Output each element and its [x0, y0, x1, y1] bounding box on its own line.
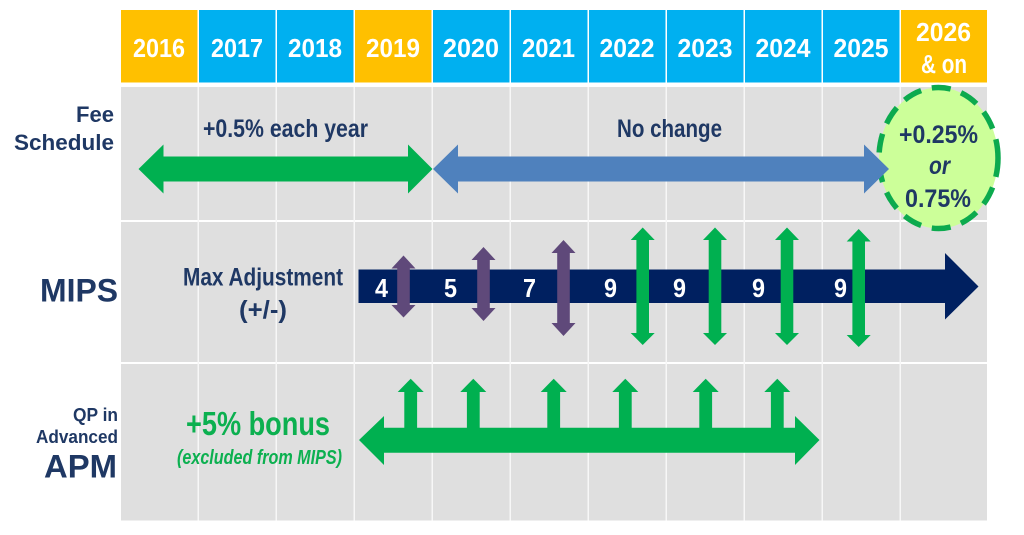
year 2023: 2023: [678, 35, 732, 63]
year 2019: 2019: [366, 35, 420, 63]
MIPS adjustment numbers: 9: [673, 273, 686, 303]
year 2026 and on: & on: [921, 51, 967, 79]
row label: QP in Advanced APM: APM: [44, 448, 117, 484]
year 2022: [589, 10, 666, 82]
row label: QP in Advanced APM: [36, 405, 118, 484]
row label: Fee Schedule: Fee: [76, 102, 114, 127]
year 2022: 2022: [600, 35, 654, 63]
year 2024: 2024: [756, 35, 811, 63]
row label: MIPS: MIPS: [40, 272, 118, 308]
arrow: purple 4 percent: [392, 256, 416, 318]
callout: 2026 conversion factor: or: [929, 152, 951, 180]
arrow: green 9 percent 2022: [631, 228, 655, 345]
text: Max Adjustment (+/-): Max Adjustment: [183, 264, 344, 292]
year 2026 and on: 2026: [916, 19, 971, 47]
row label: Fee Schedule: Schedule: [14, 130, 114, 155]
row label: QP in Advanced APM: Advanced: [36, 427, 118, 447]
year 2025: [823, 10, 900, 82]
callout: 2026 conversion factor: 0.75%: [905, 185, 971, 213]
text: Max Adjustment (+/-): (+/-): [239, 296, 287, 324]
arrow: green 9 percent 2023: [703, 228, 727, 345]
arrow: navy MIPS timeline: [358, 253, 978, 320]
MIPS adjustment numbers: 9: [834, 273, 847, 303]
row label: QP in Advanced APM: QP in: [73, 405, 118, 425]
arrow: purple 7 percent: [552, 240, 576, 336]
callout: 2026 conversion factor: +0.25%: [899, 121, 978, 149]
text: No change: No change: [617, 115, 722, 143]
text: excluded from MIPS: (excluded from MIPS): [177, 447, 342, 469]
year 2020: [433, 10, 510, 82]
text: +5% bonus: +5% bonus: [186, 405, 330, 442]
year 2025: 2025: [834, 35, 888, 63]
arrow: green two-way fee schedule: [138, 144, 432, 194]
year 2016: 2016: [133, 35, 185, 63]
arrow: green APM bonus timeline with upward arrows: [359, 379, 820, 465]
year 2024: [745, 10, 822, 82]
MIPS adjustment numbers: 9: [752, 273, 765, 303]
arrow: purple 5 percent: [472, 247, 496, 321]
MIPS adjustment numbers: 9: [604, 273, 617, 303]
text: +0.5% each year: +0.5% each year: [203, 115, 368, 143]
year 2021: [511, 10, 588, 82]
MIPS adjustment numbers: 5: [444, 273, 457, 303]
year 2016: [121, 10, 198, 82]
arrow: blue two-way no change: [433, 144, 889, 194]
year 2020: 2020: [443, 35, 499, 63]
timeline year header: [121, 10, 987, 82]
year 2023: [667, 10, 744, 82]
year 2026 and on: [901, 10, 987, 82]
arrow: green 9 percent 2025: [847, 229, 871, 347]
row label: Fee Schedule: [14, 102, 114, 155]
text: +5% bonus: [177, 405, 342, 469]
arrow: green 9 percent 2024: [775, 228, 799, 345]
callout: 2026 conversion factor: [879, 88, 998, 228]
year 2018: 2018: [288, 35, 342, 63]
year 2017: 2017: [211, 35, 263, 63]
grey timeline grid: [121, 87, 987, 520]
year 2019: [355, 10, 432, 82]
year 2017: [199, 10, 276, 82]
MIPS adjustment numbers: 4: [375, 273, 388, 303]
year 2021: 2021: [522, 35, 575, 63]
text: Max Adjustment (+/-): [183, 264, 344, 324]
MIPS adjustment numbers: [375, 273, 847, 303]
MIPS adjustment numbers: 7: [523, 273, 536, 303]
year 2018: [277, 10, 354, 82]
